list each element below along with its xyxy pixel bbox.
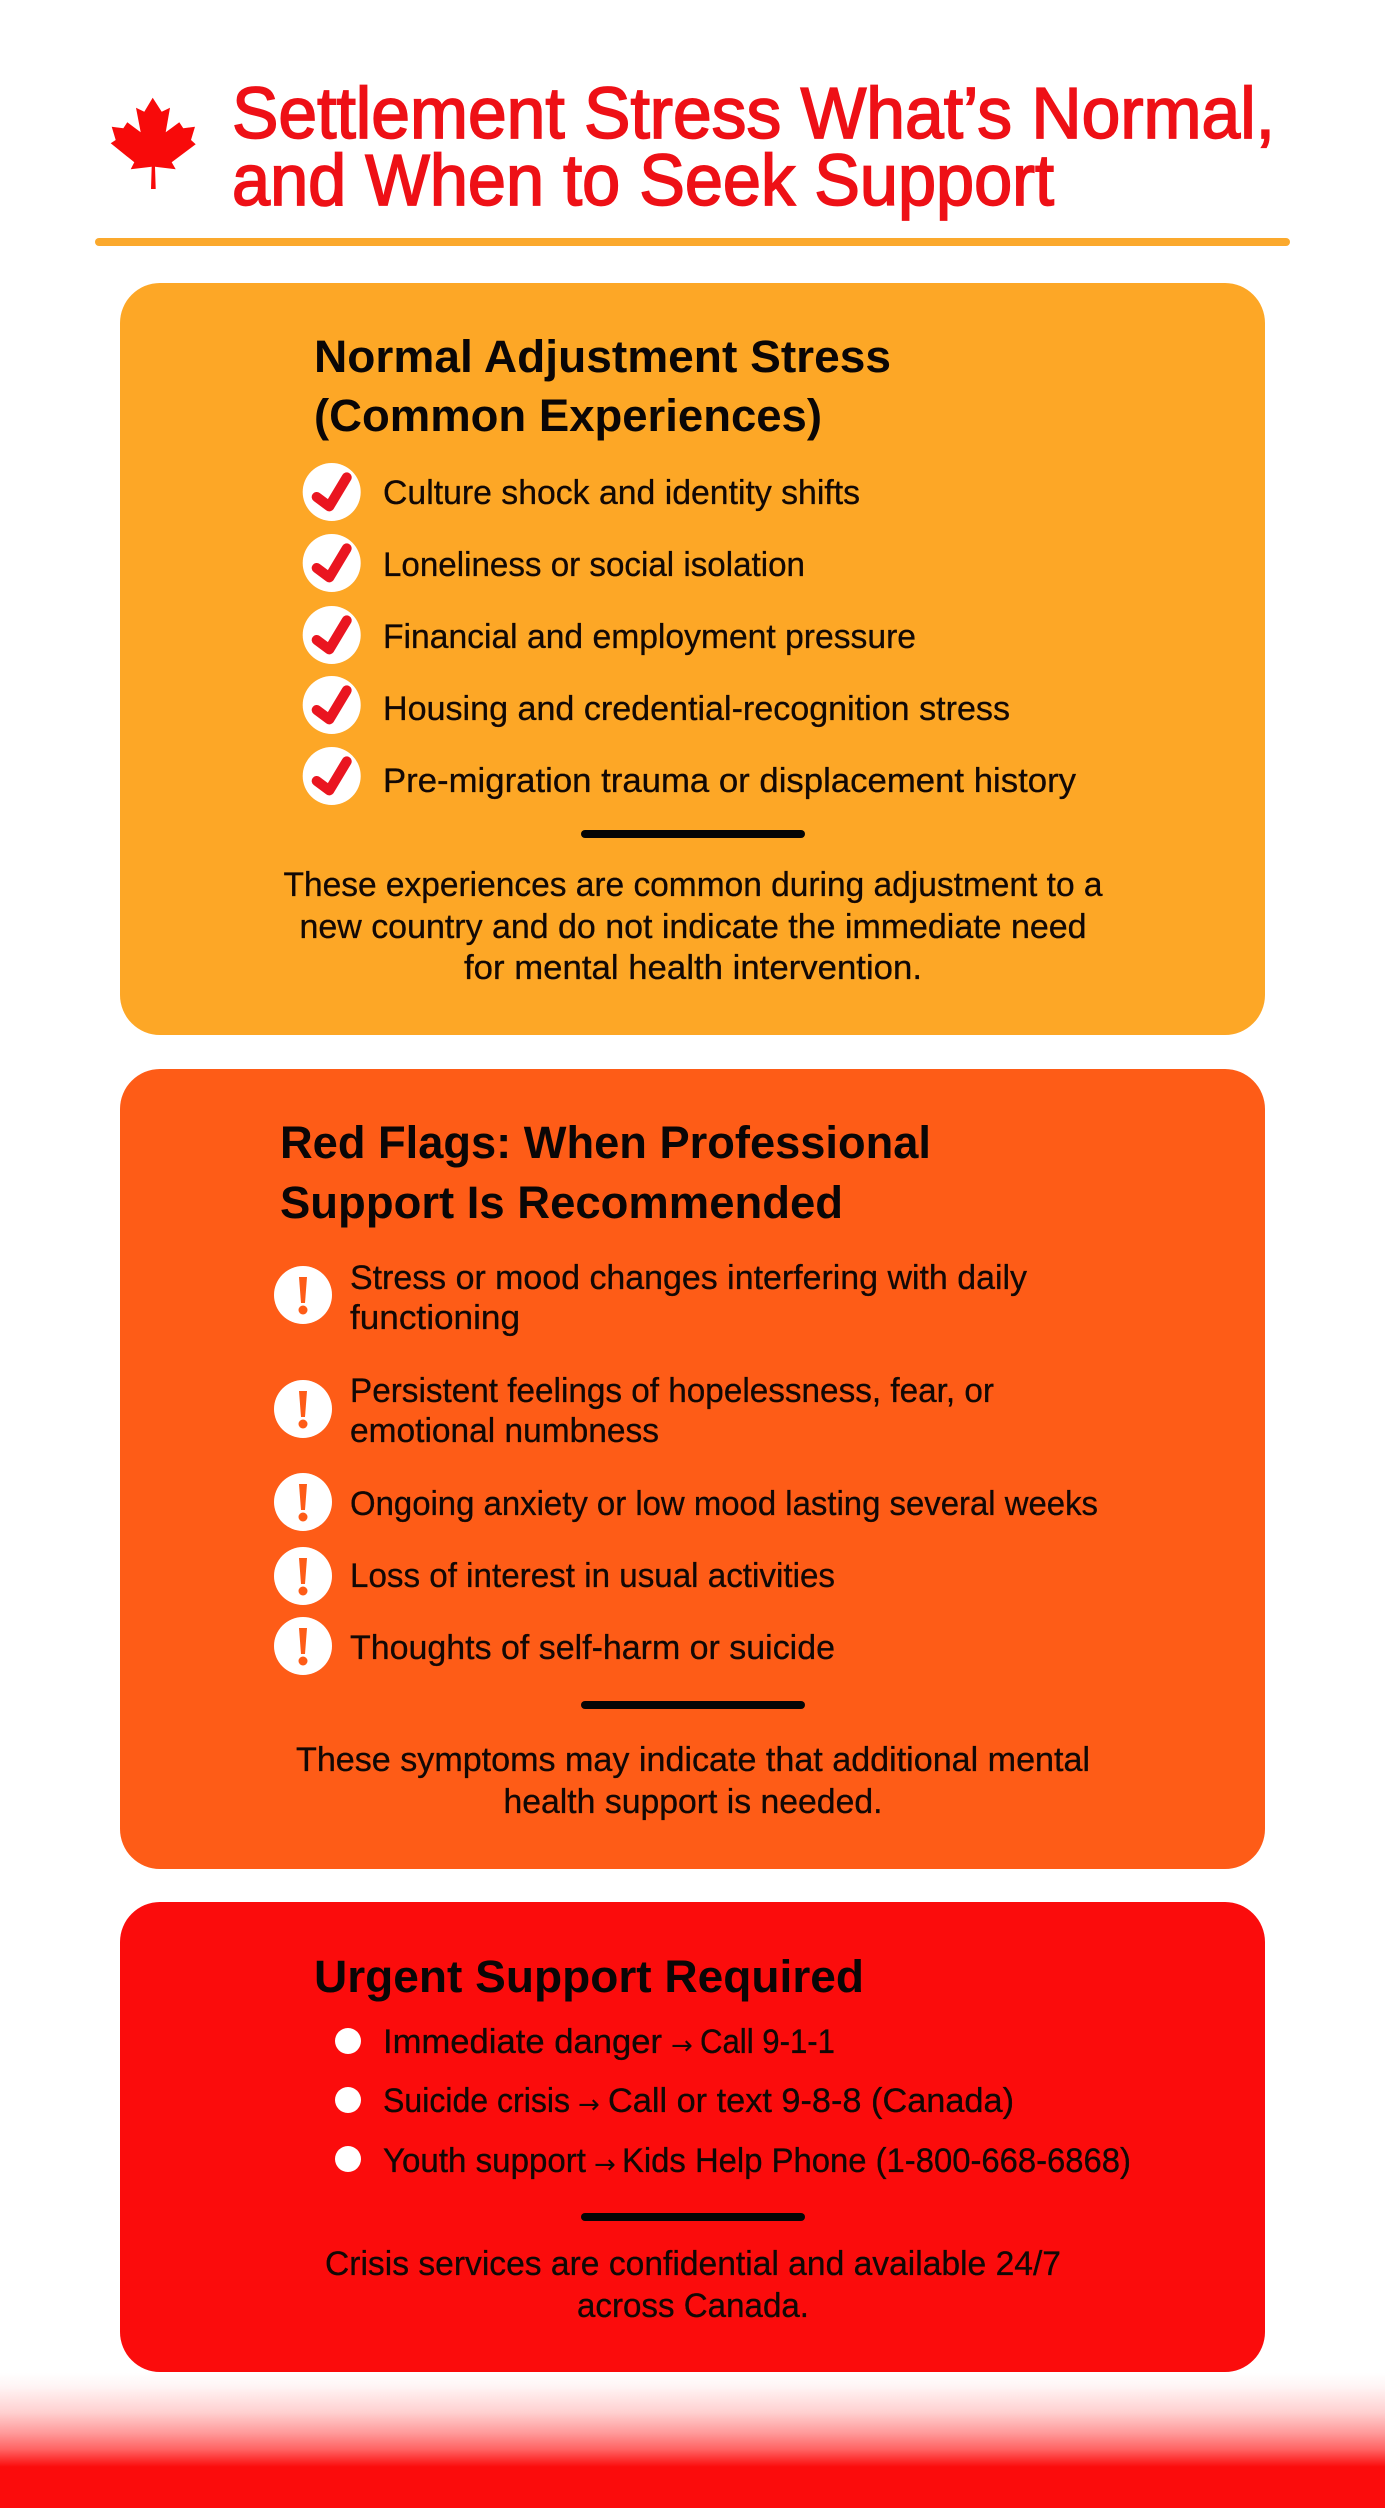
list item: hopelessness: Persistent feelings of hopelessness, fear, or	[350, 1372, 994, 1410]
list item: culture shock	[303, 463, 860, 521]
divider	[581, 830, 805, 838]
list item: hopelessness	[274, 1372, 994, 1450]
summary text: health support is needed.	[504, 1783, 882, 1821]
list item: self-harm: Thoughts of self-harm or suicide	[350, 1629, 835, 1667]
list item: self-harm	[274, 1617, 835, 1675]
list item: youth support: Kids Help Phone (1-800-668-6868)	[622, 2142, 1131, 2180]
heading: red flags: Red Flags: When Professional	[280, 1117, 931, 1168]
heading: normal adjustment stress: Normal Adjustment Stress	[314, 331, 891, 382]
heading: red flags: Support Is Recommended	[280, 1177, 843, 1228]
title underline	[95, 238, 1290, 246]
list item: loneliness	[303, 534, 805, 592]
summary text: across Canada.	[577, 2287, 809, 2325]
divider	[581, 1701, 805, 1709]
list item: daily functioning	[274, 1259, 1027, 1337]
list item: suicide crisis: Call or text 9-8-8 (Canada)	[608, 2082, 1014, 2120]
list item: youth support: Youth support	[383, 2142, 587, 2180]
summary text: for mental health intervention.	[464, 949, 922, 987]
list item: loss of interest: Loss of interest in usual activities	[350, 1557, 835, 1595]
title: Settlement Stress What’s Normal,	[232, 74, 1275, 154]
summary text: Crisis services are confidential and available 24/7	[325, 2245, 1061, 2283]
list item: hopelessness: emotional numbness	[350, 1412, 659, 1450]
summary text	[284, 866, 1103, 987]
list item: pre-migration trauma: Pre-migration trauma or displacement history	[383, 762, 1076, 800]
summary text	[296, 1741, 1090, 1821]
title	[232, 74, 1275, 221]
divider	[581, 2213, 805, 2221]
list item: immediate danger	[335, 2023, 835, 2061]
list item: immediate danger: →	[671, 2031, 693, 2061]
list item: immediate danger: Call 9-1-1	[700, 2023, 835, 2061]
list item: financial pressure: Financial and employment pressure	[383, 618, 916, 656]
panel: red flags	[120, 1069, 1265, 1869]
heading: red flags	[280, 1117, 931, 1228]
list item: immediate danger: Immediate danger	[383, 2023, 662, 2061]
list item: ongoing anxiety	[274, 1473, 1098, 1531]
list item: housing stress	[303, 676, 1010, 734]
title: and When to Seek Support	[232, 141, 1054, 221]
list item: pre-migration trauma	[303, 747, 1076, 805]
list item: daily functioning: Stress or mood changes interfering with daily	[350, 1259, 1027, 1297]
background fade band	[0, 2373, 1385, 2508]
heading: normal adjustment stress	[314, 331, 891, 441]
list item: culture shock: Culture shock and identity shifts	[383, 474, 860, 512]
list item: suicide crisis: →	[578, 2090, 600, 2120]
summary text: These experiences are common during adjustment to a	[284, 866, 1103, 904]
list item: loneliness: Loneliness or social isolation	[383, 546, 805, 584]
summary text: new country and do not indicate the immediate need	[300, 908, 1086, 946]
list item: suicide crisis	[335, 2082, 1014, 2120]
list item: youth support	[335, 2142, 1131, 2180]
list item: loss of interest	[274, 1547, 835, 1605]
list item: ongoing anxiety: Ongoing anxiety or low mood lasting several weeks	[350, 1485, 1098, 1523]
icon: maple leaf	[111, 98, 196, 189]
list item: suicide crisis: Suicide crisis	[383, 2082, 570, 2120]
summary text: These symptoms may indicate that additional mental	[296, 1741, 1090, 1779]
heading: normal adjustment stress: (Common Experiences)	[314, 390, 822, 441]
panel: normal adjustment stress	[120, 283, 1265, 1035]
list item: youth support: →	[594, 2150, 616, 2180]
list item: financial pressure	[303, 606, 916, 664]
heading: urgent support: Urgent Support Required	[314, 1951, 864, 2002]
panel: urgent support	[120, 1902, 1265, 2372]
list item: housing stress: Housing and credential-recognition stress	[383, 690, 1010, 728]
list item: daily functioning: functioning	[350, 1299, 520, 1337]
summary text	[325, 2245, 1061, 2325]
